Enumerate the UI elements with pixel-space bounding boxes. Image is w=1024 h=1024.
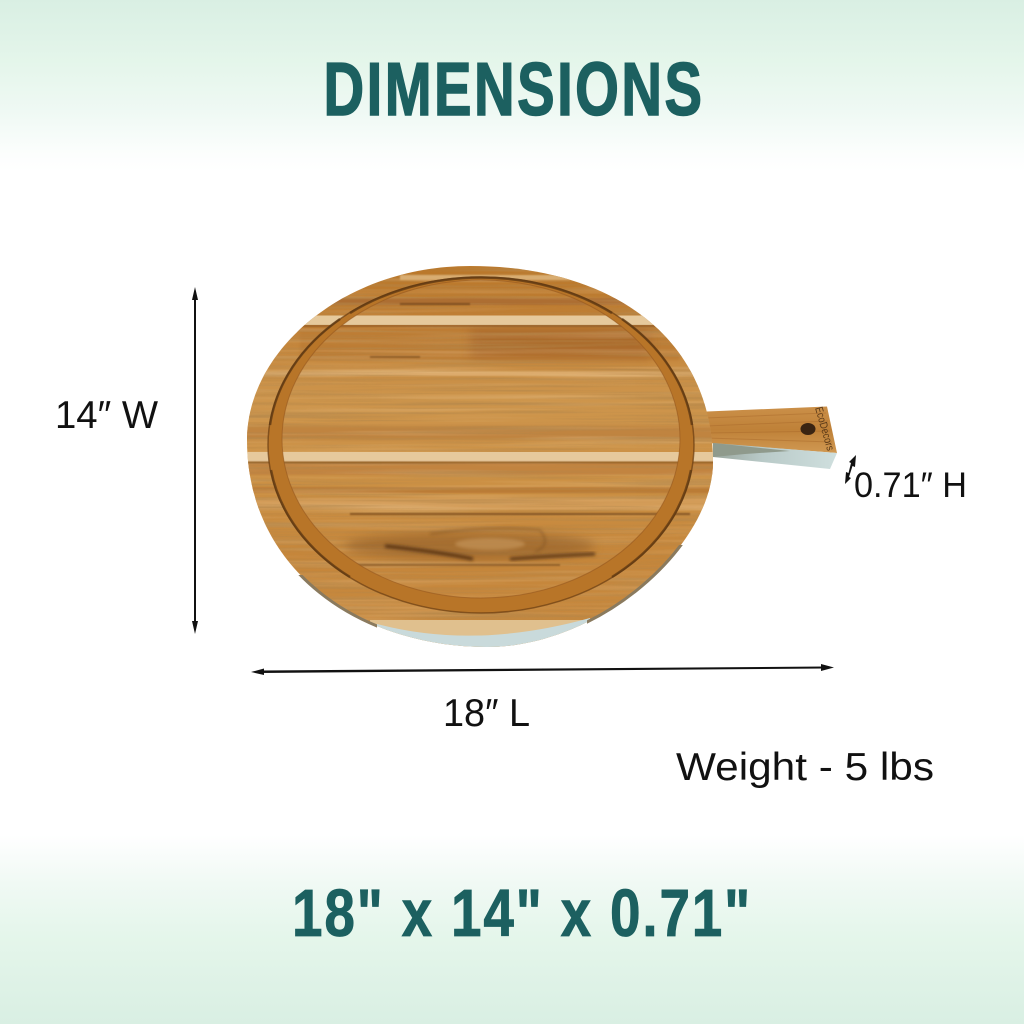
dimensions summary: 18" x 14" x 0.71" — [292, 876, 752, 950]
knot figure — [345, 528, 595, 560]
height arrow — [845, 455, 856, 484]
width arrow — [192, 287, 198, 634]
board handle — [695, 406, 837, 469]
handle brand engraving: EcoDecors — [812, 406, 836, 452]
wood grain texture — [248, 271, 712, 620]
dark grain lines — [240, 304, 720, 565]
height label: 0.71″ H — [854, 466, 967, 505]
title: DIMENSIONS — [324, 48, 704, 132]
handle hole — [800, 423, 816, 435]
wooden serving board photo — [240, 260, 837, 655]
silver side edge — [376, 618, 590, 647]
length arrow — [251, 664, 834, 675]
bottom background gradient band — [0, 835, 1024, 1024]
bottom pale end — [370, 620, 587, 647]
length label: 18″ L — [443, 692, 530, 735]
handle side edge — [713, 443, 837, 469]
grain bands — [240, 298, 720, 510]
width label: 14″ W — [55, 394, 158, 437]
pale sapwood stripes — [305, 316, 653, 325]
top background gradient band — [0, 0, 1024, 172]
weight label: Weight - 5 lbs — [676, 746, 934, 789]
round board top — [240, 260, 720, 655]
juice groove — [268, 277, 694, 613]
board side rim shadow — [298, 545, 683, 628]
